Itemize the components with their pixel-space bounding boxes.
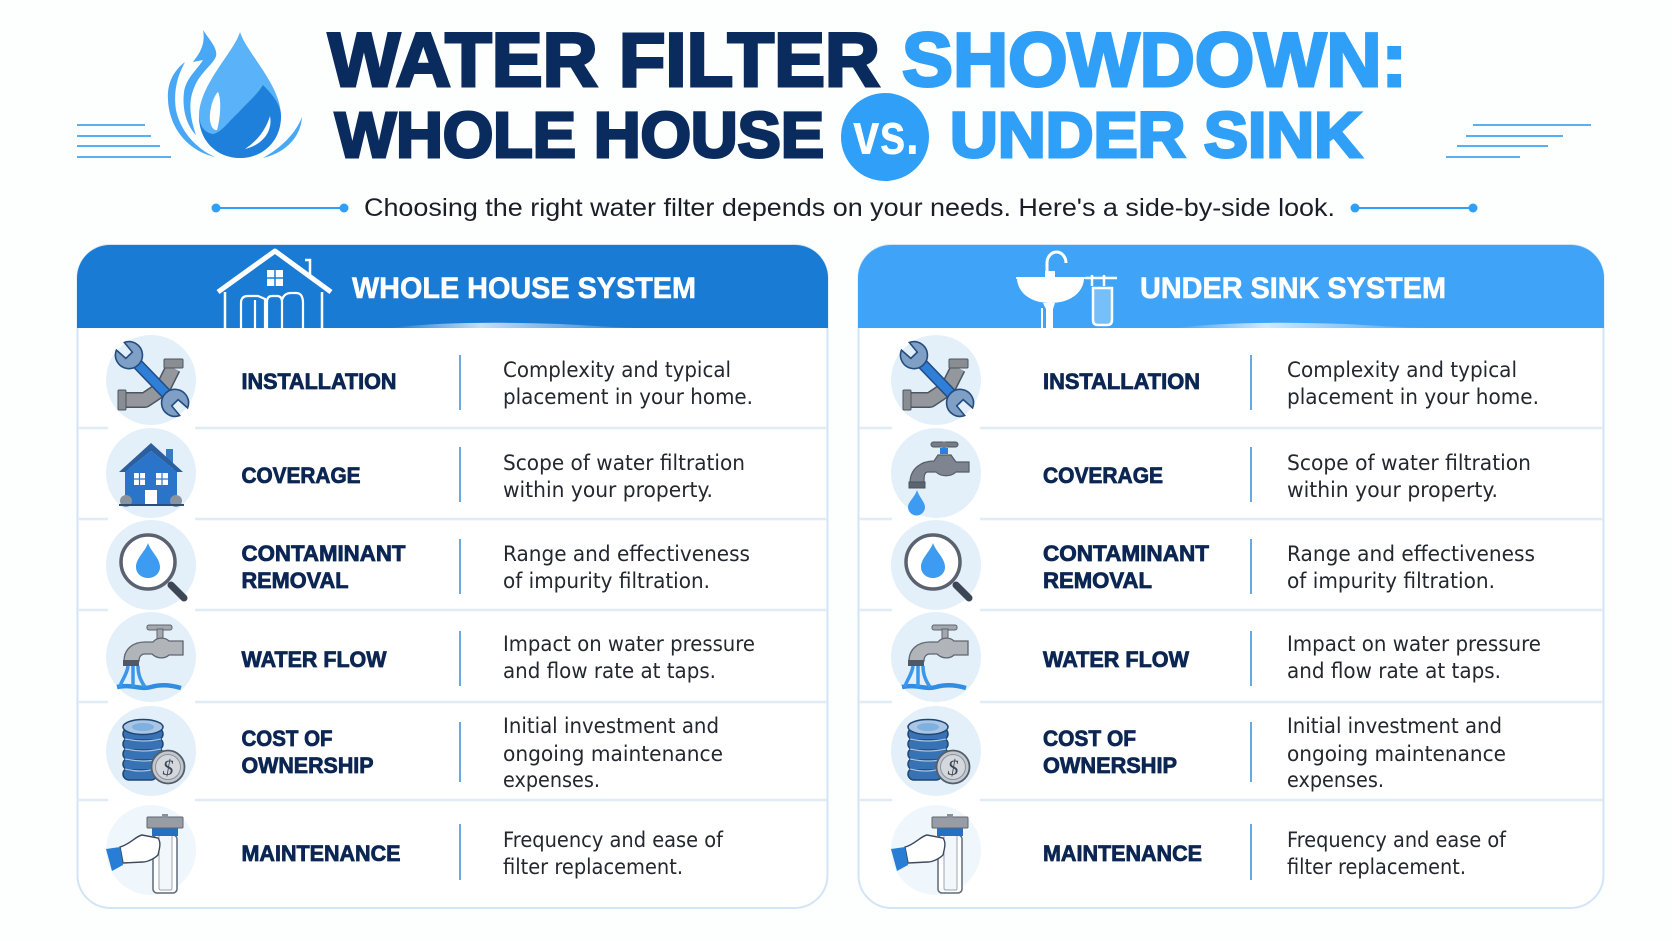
row: installation: INSTALLATION <box>242 369 396 394</box>
panel header: under sink <box>858 245 1604 328</box>
subtitle: Choosing the right water filter depends on your needs. Here's a side-by-side look. <box>364 194 1335 222</box>
icon: coin stack <box>123 720 184 784</box>
row: coverage: COVERAGE <box>1043 463 1163 488</box>
icon: coin stack <box>908 720 970 784</box>
icon: wrench and pipe <box>896 337 978 421</box>
row: installation <box>891 335 1539 425</box>
icon: sink with filter <box>1016 252 1117 328</box>
row: cost of ownership: COST OF <box>242 726 332 751</box>
row: maintenance: filter replacement. <box>1287 855 1466 879</box>
row: installation: placement in your home. <box>1287 385 1539 409</box>
icon: coin stack: $ <box>162 755 174 780</box>
panel header: whole house: WHOLE HOUSE SYSTEM <box>352 272 696 305</box>
row: contaminant removal: REMOVAL <box>1043 568 1152 593</box>
row: cost of ownership: OWNERSHIP <box>242 753 374 778</box>
title: vs. <box>853 102 919 167</box>
row: cost of ownership: ongoing maintenance <box>503 742 723 766</box>
row: contaminant removal: Range and effectiveness <box>1287 542 1535 566</box>
icon: water drop logo <box>168 30 302 158</box>
row: water flow <box>891 612 1541 702</box>
row: water flow: WATER FLOW <box>1043 647 1190 672</box>
panel header: under sink: UNDER SINK SYSTEM <box>1140 272 1446 305</box>
icon: house with tanks <box>218 251 331 328</box>
row: contaminant removal: REMOVAL <box>242 568 349 593</box>
row: water flow: WATER FLOW <box>242 647 387 672</box>
panel: whole house system <box>77 245 828 908</box>
row: coverage: within your property. <box>1287 478 1498 502</box>
panel: under sink system <box>858 245 1604 908</box>
row: water flow <box>106 612 755 702</box>
row: maintenance <box>891 805 1507 895</box>
row: maintenance: MAINTENANCE <box>1043 841 1202 866</box>
row: cost of ownership: expenses. <box>503 768 600 792</box>
row: contaminant removal: of impurity filtration. <box>1287 569 1495 593</box>
row: contaminant removal: Range and effectiveness <box>503 542 750 566</box>
panel header: whole house <box>77 245 828 328</box>
row: water flow: Impact on water pressure <box>1287 632 1541 656</box>
row separators: under sink <box>859 428 1603 800</box>
row: coverage: Scope of water filtration <box>1287 451 1531 475</box>
row: installation: INSTALLATION <box>1043 369 1200 394</box>
row: cost of ownership: COST OF <box>1043 726 1136 751</box>
row: coverage: within your property. <box>503 478 713 502</box>
decorative speed lines left <box>77 125 171 157</box>
icon: running faucet <box>117 625 183 688</box>
icon: wrench and pipe <box>111 337 193 421</box>
row: coverage: COVERAGE <box>242 463 360 488</box>
row: contaminant removal: CONTAMINANT <box>242 541 406 566</box>
icon: coin stack: $ <box>948 755 958 780</box>
icon: running faucet <box>902 625 968 688</box>
row: installation: Complexity and typical <box>1287 358 1517 382</box>
title: SHOWDOWN: <box>902 18 1407 103</box>
row: installation <box>106 335 753 425</box>
row: cost of ownership <box>891 706 1506 796</box>
row: cost of ownership <box>106 706 723 796</box>
icon: hand and filter cartridge <box>891 814 968 893</box>
decorative speed lines right <box>1446 125 1591 157</box>
icon: hand and filter cartridge <box>106 814 183 893</box>
row: contaminant removal: CONTAMINANT <box>1043 541 1209 566</box>
row: water flow: and flow rate at taps. <box>503 659 716 683</box>
row: installation: placement in your home. <box>503 385 753 409</box>
row: maintenance: MAINTENANCE <box>242 841 400 866</box>
row: maintenance: filter replacement. <box>503 855 683 879</box>
title: WATER FILTER <box>328 18 880 103</box>
row: cost of ownership: expenses. <box>1287 768 1384 792</box>
title: WHOLE HOUSE <box>335 99 824 171</box>
row: water flow: Impact on water pressure <box>503 632 755 656</box>
row: contaminant removal <box>891 520 1535 610</box>
icon: faucet with drop <box>908 442 969 516</box>
title <box>328 18 1407 181</box>
icon: house <box>119 443 184 507</box>
row: maintenance: Frequency and ease of <box>503 828 724 852</box>
row: installation: Complexity and typical <box>503 358 731 382</box>
row: water flow: and flow rate at taps. <box>1287 659 1501 683</box>
row: coverage <box>106 428 745 518</box>
row: cost of ownership: OWNERSHIP <box>1043 753 1177 778</box>
row separators: whole house <box>78 428 827 800</box>
row: cost of ownership: Initial investment and <box>503 714 719 738</box>
title: UNDER SINK <box>950 99 1362 171</box>
row: contaminant removal: of impurity filtration. <box>503 569 710 593</box>
row: maintenance: Frequency and ease of <box>1287 828 1507 852</box>
icon: magnifier with drop <box>121 535 184 598</box>
row: contaminant removal <box>106 520 750 610</box>
row: cost of ownership: Initial investment and <box>1287 714 1502 738</box>
row: maintenance <box>106 805 724 895</box>
icon: magnifier with drop <box>906 535 969 598</box>
row: coverage: Scope of water filtration <box>503 451 745 475</box>
row: coverage <box>891 428 1531 518</box>
row: cost of ownership: ongoing maintenance <box>1287 742 1506 766</box>
